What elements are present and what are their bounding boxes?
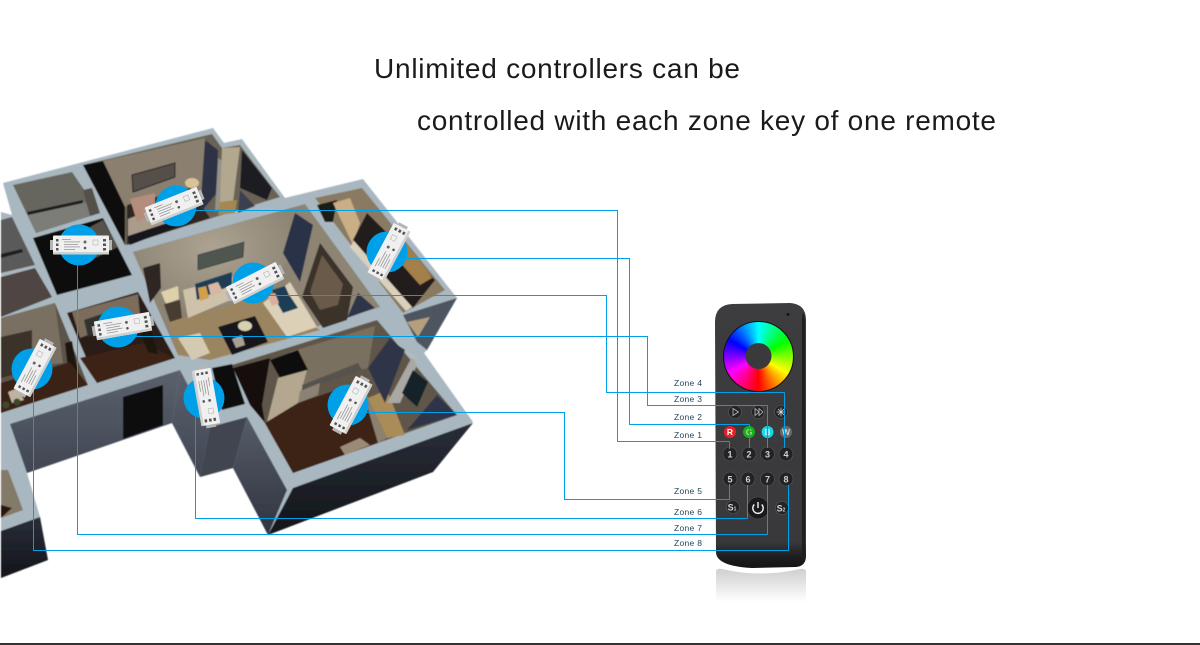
outer walls top surface <box>1 128 473 578</box>
wardrobe area <box>233 358 270 423</box>
zone labels: Zone 5 <box>674 486 702 496</box>
number buttons: 7 <box>765 474 770 484</box>
title: Unlimited controllers can be <box>374 53 740 84</box>
controller: closet <box>50 224 112 266</box>
bedroom curtain <box>200 140 218 213</box>
RGBW buttons <box>724 426 792 438</box>
living floor <box>168 296 320 360</box>
exterior wall: notch faces <box>172 370 210 477</box>
line: zone 5 <box>360 412 730 500</box>
living lamp <box>161 286 179 304</box>
room: dark closet <box>33 218 132 295</box>
remote reflection <box>716 569 806 602</box>
line: zone 3 <box>130 336 768 448</box>
living curtains and window <box>283 213 313 282</box>
controller: center closet <box>184 365 224 429</box>
room: living room <box>133 204 380 360</box>
room: bottom left <box>1 303 88 413</box>
number buttons: 6 <box>745 474 751 484</box>
room: top bedroom <box>83 134 280 245</box>
living sofa <box>183 277 235 318</box>
counter <box>302 363 362 390</box>
title: controlled with each zone key of one remote <box>417 105 996 136</box>
controller: balcony <box>366 220 412 284</box>
living coffee table <box>218 316 268 355</box>
sensor dot <box>786 313 790 316</box>
title <box>374 53 996 136</box>
room: right balcony <box>315 188 445 313</box>
balcony side wall <box>403 298 457 350</box>
wheel centre <box>746 343 772 369</box>
controller: top bedroom <box>142 186 206 226</box>
living back wall <box>133 208 292 322</box>
power button <box>747 497 769 519</box>
controller: lower right bedroom <box>328 373 374 437</box>
controller: bottom left room <box>12 336 58 400</box>
number buttons: 5 <box>727 474 733 484</box>
room: dining <box>67 292 175 383</box>
connection lines <box>34 210 788 550</box>
room: small center closet <box>212 364 245 410</box>
number buttons <box>723 447 793 514</box>
number buttons: 8 <box>783 474 789 484</box>
zone labels: Zone 3 <box>674 394 702 404</box>
number buttons: S2 <box>777 504 786 514</box>
RGBW buttons: R <box>727 427 733 437</box>
RGBW buttons: W <box>782 427 791 437</box>
number buttons: S1 <box>728 502 737 512</box>
room: bathroom <box>13 172 100 233</box>
RGBW buttons: G <box>746 427 753 437</box>
living armchair <box>178 333 210 360</box>
line: zone 4 <box>265 296 784 448</box>
bedroom bed <box>127 188 210 245</box>
golden floor <box>368 390 405 438</box>
lines over remote keys <box>715 392 788 550</box>
zone labels: Zone 8 <box>674 538 702 548</box>
button row: play, skip, brightness <box>728 406 788 418</box>
floor plan building <box>1 128 473 578</box>
controller: living room <box>223 260 287 306</box>
zone labels <box>674 378 702 548</box>
door <box>123 385 163 439</box>
remote control <box>715 303 806 568</box>
line: zone 2 <box>400 258 750 448</box>
living left door <box>143 263 161 303</box>
number buttons: 4 <box>783 450 789 460</box>
exterior wall: long left <box>10 370 180 473</box>
line: zone 8 <box>34 380 788 550</box>
bench <box>340 438 370 455</box>
bedroom headboard <box>132 163 175 192</box>
living painting <box>198 242 244 270</box>
curtains <box>368 338 405 403</box>
controller: dining room <box>91 306 155 348</box>
zone labels: Zone 6 <box>674 507 702 517</box>
zone labels: Zone 2 <box>674 412 702 422</box>
room: lower left fragment <box>1 470 23 518</box>
remote body <box>715 303 806 568</box>
line: zone 6 <box>196 410 748 518</box>
bedroom alcove <box>220 147 240 202</box>
bottom rule <box>0 643 1200 645</box>
zone labels: Zone 7 <box>674 523 702 533</box>
room: lower right bedroom <box>232 320 457 473</box>
number buttons: 3 <box>765 450 770 460</box>
RGBW buttons: B <box>764 427 771 437</box>
exterior wall: lower right <box>268 423 473 535</box>
number buttons: 1 <box>727 450 733 460</box>
zone labels: Zone 4 <box>674 378 702 388</box>
colour wheel <box>723 320 794 392</box>
rooms: upper left <box>1 217 35 273</box>
line: zone 7 <box>78 260 768 534</box>
zone labels: Zone 1 <box>674 430 702 440</box>
number buttons: 2 <box>746 450 752 460</box>
exterior wall: lower left block <box>1 517 48 578</box>
wood floor <box>265 382 378 473</box>
line: zone 1 <box>190 210 730 449</box>
